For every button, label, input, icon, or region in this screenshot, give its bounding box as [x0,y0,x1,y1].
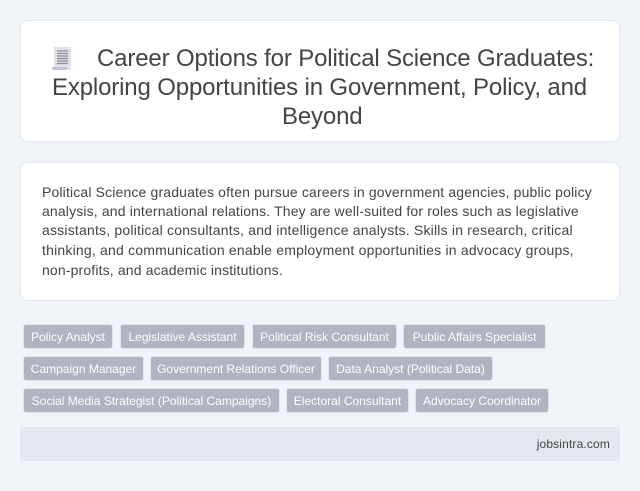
tag [252,324,397,349]
tag: Legislative Assistant [128,330,237,344]
footer source: jobsintra.com [537,437,610,451]
tag [403,324,546,349]
tag: Government Relations Officer [157,362,315,376]
tag [328,356,493,381]
tag [415,388,549,413]
tag [23,324,113,349]
tag [120,324,245,349]
career tags [23,324,549,413]
title: Beyond [282,103,362,130]
description text [42,184,592,278]
tag [150,356,322,381]
tag: Social Media Strategist (Political Campaigns) [32,394,271,408]
description text: non-profits, and academic institutions. [42,262,283,278]
description text: assistants, political consultants, and intelligence analysts. Skills in research, critical [42,222,573,238]
tag: Data Analyst (Political Data) [336,362,485,376]
panel: description [20,162,620,301]
tag [23,388,280,413]
tag [286,388,409,413]
tag: Policy Analyst [31,330,105,344]
title: Exploring Opportunities in Government, Policy, and [52,74,587,101]
tag: Advocacy Coordinator [423,394,541,408]
panel: title card [20,20,620,142]
icon: document scroll [52,47,71,70]
footer bar [20,427,620,461]
tag [23,356,144,381]
description text: analysis, and international relations. They are well-suited for roles such as legislative [42,203,579,219]
tag: Political Risk Consultant [260,330,389,344]
title [52,45,594,130]
tag: Campaign Manager [31,362,136,376]
description text: Political Science graduates often pursue careers in government agencies, public policy [42,184,592,200]
title: Career Options for Political Science Graduates: [97,45,594,72]
description text: thinking, and communication enable employment opportunities in advocacy groups, [42,242,574,258]
tag: Electoral Consultant [294,394,401,408]
tag: Public Affairs Specialist [413,330,536,344]
